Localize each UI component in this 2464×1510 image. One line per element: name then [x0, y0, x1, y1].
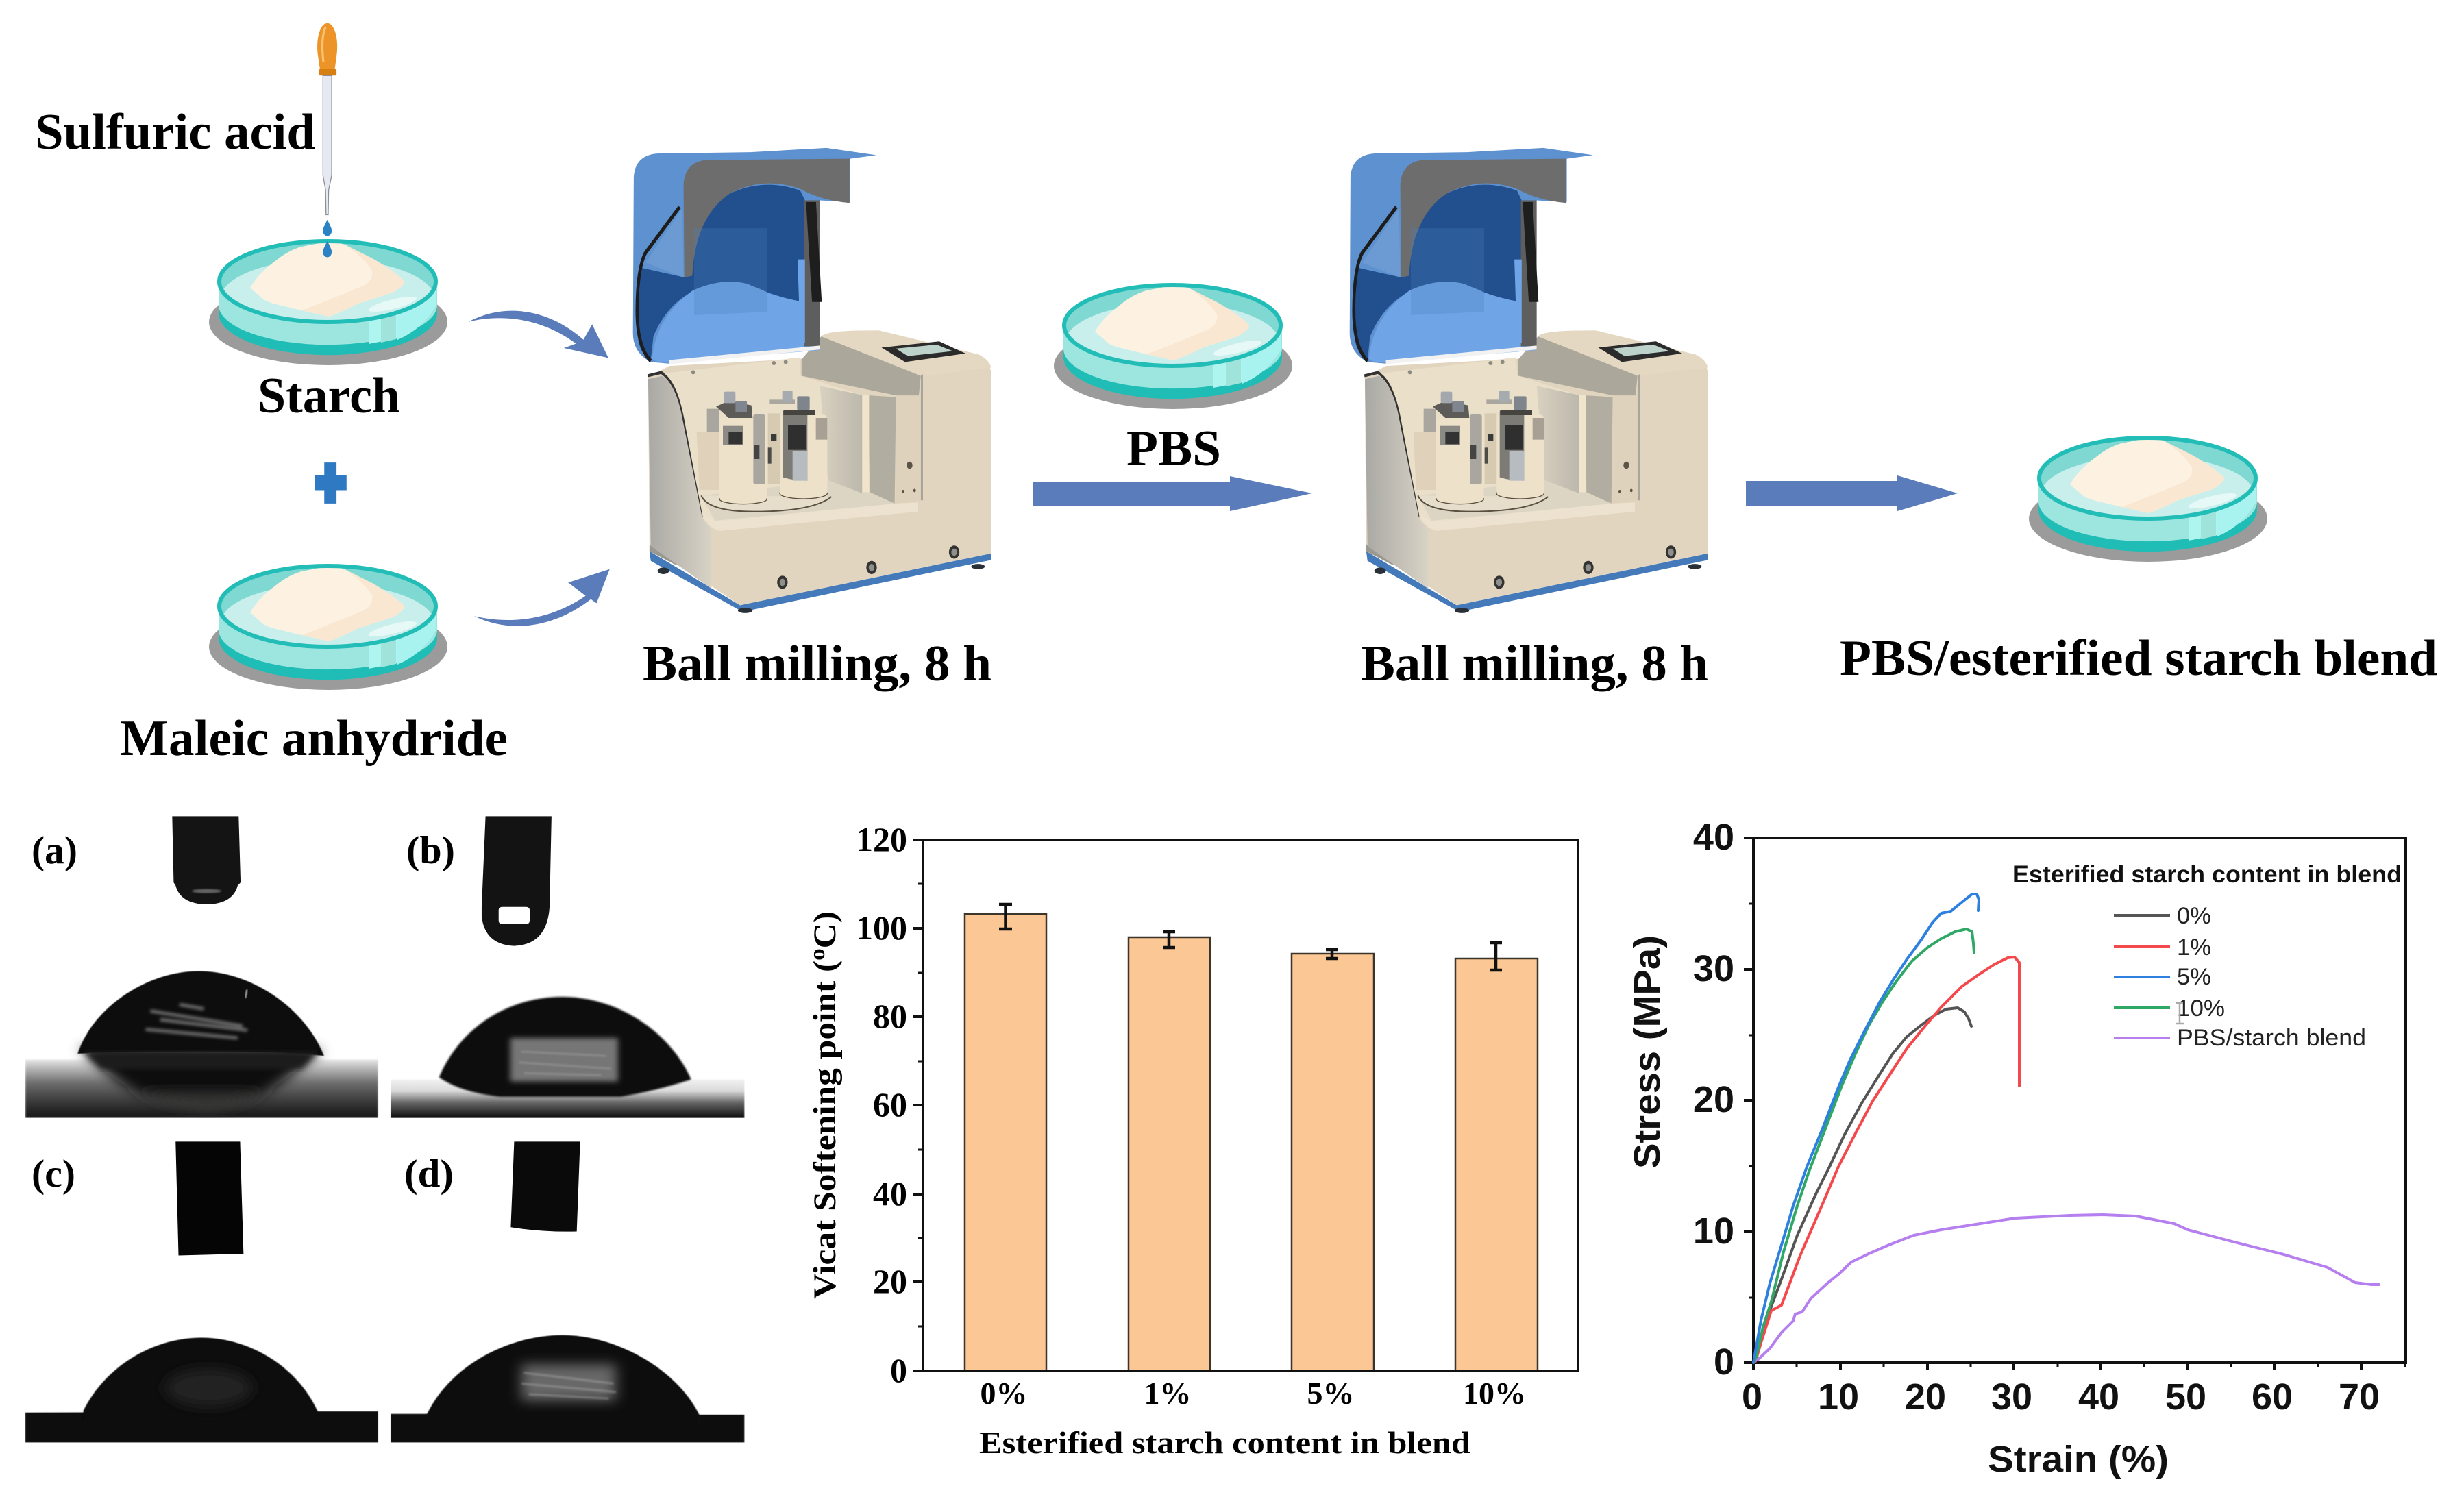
- x tick labels: 10%: [1463, 1376, 1526, 1411]
- panel letter b: (b): [406, 829, 455, 872]
- y axis title: Vicat Softening point (: [807, 990, 843, 1299]
- y tick labels: 40: [1693, 817, 1734, 858]
- y axis title: Stress (MPa): [1627, 935, 1668, 1169]
- icon: ball mill 2: [1350, 148, 1708, 613]
- plot frame and ticks: [913, 840, 1578, 1371]
- x tick labels: 1%: [1144, 1376, 1191, 1411]
- photo (a): [25, 816, 378, 1118]
- y axis title: o: [804, 948, 829, 961]
- x tick labels: 5%: [1307, 1376, 1354, 1411]
- x tick labels: [980, 1376, 1526, 1411]
- y tick labels: 40: [873, 1174, 907, 1213]
- curve: 1%: [1753, 957, 2019, 1363]
- arrow: maleic anhydride to mill: [474, 569, 610, 626]
- y tick labels: 20: [1693, 1079, 1734, 1120]
- icon: dropper with drops: [317, 23, 337, 257]
- arrow: first mill to second mill: [1033, 476, 1312, 511]
- curve: 5%: [1753, 894, 1979, 1363]
- legend title: Esterified starch content in blend: [2012, 861, 2402, 888]
- curves: [1753, 894, 2379, 1363]
- plot frame and ticks: [1744, 838, 2406, 1370]
- x tick labels: 0: [1742, 1376, 1762, 1418]
- error bars: [999, 904, 1502, 970]
- label: ball milling 2: Ball milling, 8 h: [1361, 636, 1708, 692]
- icon: ball mill 1: [633, 148, 991, 613]
- label: PBS: PBS: [1126, 421, 1221, 477]
- y tick labels: 100: [856, 908, 907, 947]
- y tick labels: 10: [1693, 1211, 1734, 1252]
- panel letter a: (a): [32, 829, 77, 872]
- legend entry 10%: 10%: [2177, 995, 2225, 1022]
- label: ball milling 1: Ball milling, 8 h: [643, 636, 991, 692]
- line chart: stress-strain curves: [1627, 817, 2406, 1480]
- panel letter c: (c): [32, 1152, 75, 1196]
- photo (c): [25, 1141, 378, 1443]
- legend entry 1%: 1%: [2177, 935, 2211, 961]
- arrow: starch to mill: [469, 311, 608, 358]
- x tick labels: 20: [1905, 1376, 1946, 1418]
- y tick labels: 80: [873, 997, 907, 1035]
- x tick labels: 10: [1818, 1376, 1859, 1418]
- panel: process schematic: [35, 23, 2437, 767]
- label: PBS/esterified starch blend: PBS/esterified starch blend: [1840, 630, 2437, 686]
- icon: petri dish with blend: [2029, 437, 2267, 562]
- photo (b): [391, 816, 745, 1118]
- x axis title: Esterified starch content in blend: [979, 1425, 1470, 1460]
- x tick labels: 70: [2339, 1376, 2380, 1418]
- legend: [2012, 861, 2402, 1051]
- x tick labels: 50: [2165, 1376, 2206, 1418]
- legend entry 5%: 5%: [2177, 964, 2211, 990]
- y axis title: C): [807, 911, 843, 948]
- x tick labels: 0%: [980, 1376, 1028, 1411]
- x tick labels: 60: [2252, 1376, 2293, 1418]
- y tick labels: [856, 820, 907, 1389]
- arrow: second mill to blend: [1746, 475, 1958, 511]
- x tick labels: [1742, 1376, 2380, 1418]
- y tick labels: [1693, 817, 1734, 1383]
- panel: contact angle photos: [25, 816, 745, 1443]
- bar chart: Vicat softening point: [804, 820, 1578, 1460]
- y tick labels: 20: [873, 1262, 907, 1300]
- y tick labels: 30: [1693, 948, 1734, 989]
- curve: 10%: [1753, 929, 1974, 1363]
- curve: 0%: [1753, 1008, 1971, 1363]
- cursor mark: [2176, 1003, 2184, 1024]
- photo (d): [391, 1141, 745, 1443]
- y tick labels: 60: [873, 1085, 907, 1124]
- x tick labels: 30: [1991, 1376, 2032, 1418]
- y tick labels: 120: [856, 820, 907, 858]
- x axis title: Strain (%): [1988, 1439, 2169, 1480]
- y tick labels: 0: [890, 1351, 907, 1389]
- bars: [965, 914, 1538, 1371]
- label: sulfuric acid: Sulfuric acid: [35, 104, 315, 160]
- icon: petri dish with maleic anhydride: [209, 565, 447, 690]
- icon: plus sign: [315, 462, 347, 504]
- legend entry 0%: 0%: [2177, 903, 2211, 929]
- icon: petri dish with starch: [209, 240, 447, 365]
- y tick labels: 0: [1714, 1341, 1734, 1383]
- icon: petri dish with PBS: [1054, 284, 1292, 409]
- label: starch: Starch: [258, 368, 400, 424]
- legend entry PBS/starch blend: PBS/starch blend: [2177, 1025, 2366, 1051]
- panel letter d: (d): [404, 1152, 454, 1196]
- curve: PBS/starch blend: [1758, 1215, 2379, 1360]
- x tick labels: 40: [2078, 1376, 2119, 1418]
- label: maleic anhydride: Maleic anhydride: [120, 710, 508, 767]
